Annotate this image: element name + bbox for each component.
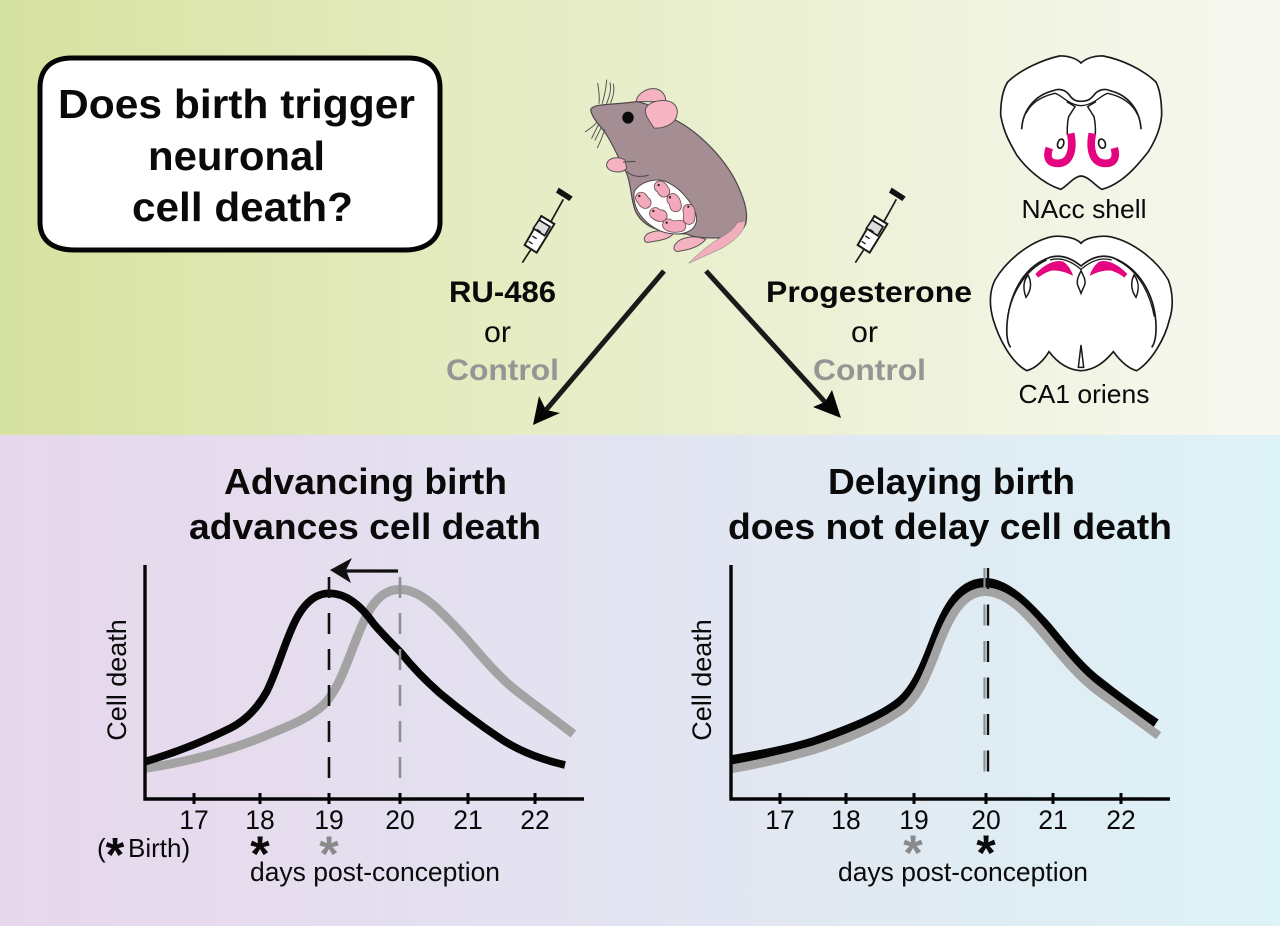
arrow: to advancing birth panel [533,271,664,425]
mouse body [591,102,747,238]
legend: birth: ( [97,833,106,863]
mouse paw [607,158,627,172]
mouse hind feet [644,231,673,242]
x tick labels: 19 [899,805,929,835]
heading: advancing birth [189,461,541,547]
text: RU-486 or Control: or [484,316,511,349]
dashed line: grey birth [983,568,986,772]
dashed line: black birth [987,568,989,772]
heading: delaying birth [728,461,1172,547]
x axis label: days post-conception [250,857,500,887]
x tick labels: 21 [1038,805,1068,835]
marker: black birth asterisk: * [250,826,270,882]
text: Progesterone or Control: Progesterone [766,276,972,309]
curve: RU-486 black [145,593,565,765]
marker: black birth asterisk: * [976,825,996,881]
panel: bottom background [0,435,1280,926]
x tick labels [179,805,550,835]
marker: grey birth asterisk: * [319,826,339,882]
x tick labels: 18 [831,805,861,835]
y axis label: Cell death [102,619,132,741]
axes [145,565,584,799]
marker: grey birth asterisk: * [903,825,923,881]
x tick labels: 21 [453,805,483,835]
icon: brain section CA1 oriens [990,236,1172,371]
legend: birth [97,829,190,882]
y axis label: Cell death [687,619,717,741]
icon: pregnant mouse [585,80,747,263]
ticks [194,793,535,804]
text: RU-486 or Control: Control [446,354,559,387]
curve: progesterone black [731,583,1156,760]
chart: delaying birth line chart [687,565,1170,887]
legend: birth: Birth) [128,833,190,863]
mouse far ear [636,89,666,102]
heading: delaying birth: Delaying birth [828,461,1075,502]
magenta CA1 oriens regions [1035,261,1127,278]
text: RU-486 or Control [446,276,559,387]
x tick labels: 22 [1106,805,1136,835]
icon: syringe left [522,188,573,263]
text: RU-486 or Control: RU-486 [449,276,556,309]
icon: syringe right [855,188,906,263]
mouse whiskers [585,80,614,148]
callout: question box: Does birth trigger [58,81,415,127]
x tick labels: 17 [765,805,795,835]
mouse tail [689,221,745,263]
text: Progesterone or Control [766,276,972,387]
heading: delaying birth: does not delay cell death [728,506,1172,547]
heading: advancing birth: advances cell death [189,506,541,547]
x axis label: days post-conception [838,857,1088,887]
mouse eye [622,112,634,124]
x tick labels: 18 [245,805,275,835]
ticks [780,793,1121,804]
axes [731,565,1170,799]
dashed line: day 20 [399,577,401,783]
callout: question box: neuronal [148,133,325,179]
legend: birth: * [106,829,125,882]
label: NAcc shell: NAcc shell [1022,194,1146,224]
mouse near ear [645,101,677,128]
panel: top background [0,0,1280,435]
heading: advancing birth: Advancing birth [224,461,507,502]
text: Progesterone or Control: Control [813,354,926,387]
x tick labels: 17 [179,805,209,835]
magenta NAcc shell regions [1048,133,1115,163]
x tick labels [765,805,1136,835]
chart: advancing birth line chart [97,558,584,887]
curve: control grey [731,592,1159,769]
arrow: to delaying birth panel [706,271,841,418]
x tick labels: 22 [520,805,550,835]
mouse womb with pups [634,180,697,234]
dashed line: day 19 [328,577,330,783]
curve: control grey [145,589,573,768]
icon: brain section NAcc shell [1001,56,1162,189]
text: Progesterone or Control: or [851,316,878,349]
callout: question box [40,58,440,250]
x tick labels: 20 [971,805,1001,835]
x tick labels: 20 [385,805,415,835]
callout: question box: cell death? [132,184,353,230]
x tick labels: 19 [314,805,344,835]
arrow: shift to day 19 [330,558,398,583]
label: CA1 oriens: CA1 oriens [1018,379,1150,409]
